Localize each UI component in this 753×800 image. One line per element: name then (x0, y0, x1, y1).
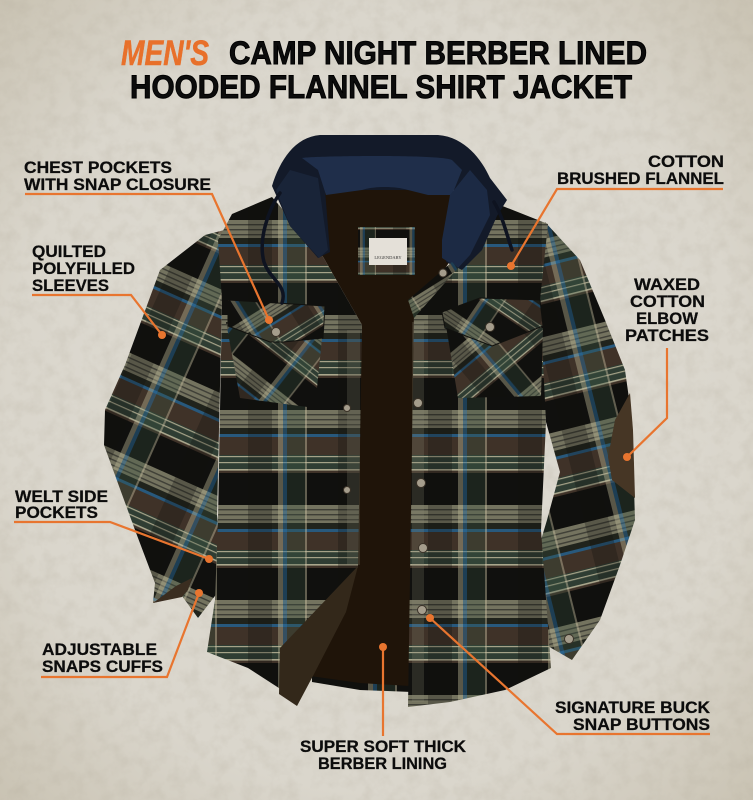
callout: elbow patches (623, 276, 709, 461)
callout: adjustable cuffs (41, 589, 203, 677)
callout: adjustable cuffs: ADJUSTABLE (42, 641, 157, 659)
left cuff flap (153, 578, 192, 603)
drawstrings (262, 193, 512, 303)
callout: berber lining: SUPER SOFT THICK (300, 738, 466, 756)
hood outer (272, 135, 507, 270)
callout: brushed flannel: BRUSHED FLANNEL (557, 170, 724, 188)
left pocket flap (228, 300, 325, 342)
callout: welt side pockets (14, 488, 213, 563)
berber lining (310, 185, 452, 686)
right sleeve (520, 222, 635, 660)
callout: chest pockets: WITH SNAP CLOSURE (24, 176, 211, 194)
callout: quilted sleeves: SLEEVES (32, 277, 109, 295)
title (121, 34, 647, 105)
jacket illustration (104, 135, 635, 707)
callout: adjustable cuffs: SNAPS CUFFS (42, 658, 163, 676)
title: HOODED FLANNEL SHIRT JACKET (130, 69, 632, 105)
plackets (347, 322, 424, 702)
hood right fold (442, 170, 490, 268)
right chest pocket (446, 326, 543, 398)
callout: snap buttons: SNAP BUTTONS (573, 716, 710, 734)
callout: berber lining: BERBER LINING (318, 755, 447, 773)
callout: snap buttons: SIGNATURE BUCK (555, 699, 710, 717)
callout: welt side pockets: POCKETS (15, 504, 98, 522)
collar plaid tab right (408, 262, 458, 318)
callout: elbow patches: WAXED (634, 276, 700, 294)
title: MEN'S (121, 34, 209, 73)
callout: welt side pockets: WELT SIDE (15, 488, 108, 506)
neck tag: LEGENDARY (374, 255, 402, 260)
right pocket flap (442, 298, 543, 346)
elbow patch (608, 393, 635, 498)
hood left fold (276, 170, 328, 258)
callout: snap buttons (426, 614, 710, 734)
right front panel (408, 205, 551, 707)
back hem strip (312, 670, 412, 692)
callout: quilted sleeves (32, 243, 166, 339)
callout: elbow patches: COTTON (630, 293, 705, 311)
left chest pocket (226, 322, 322, 408)
callout: brushed flannel (507, 153, 724, 270)
left front panel (207, 197, 362, 690)
callout: berber lining (300, 643, 466, 773)
left sleeve (104, 228, 232, 618)
callout: quilted sleeves: POLYFILLED (32, 260, 135, 278)
callout: chest pockets (24, 159, 273, 324)
title: CAMP NIGHT BERBER LINED (229, 35, 647, 71)
neck tag (358, 227, 415, 275)
left front facing (279, 566, 358, 706)
hood inner fleece (302, 156, 462, 195)
callout: elbow patches: ELBOW (636, 310, 698, 328)
callout: quilted sleeves: QUILTED (32, 243, 106, 261)
snap buttons (272, 269, 574, 644)
callout: elbow patches: PATCHES (625, 327, 709, 345)
callout: brushed flannel: COTTON (648, 153, 724, 171)
callout: chest pockets: CHEST POCKETS (24, 159, 172, 177)
